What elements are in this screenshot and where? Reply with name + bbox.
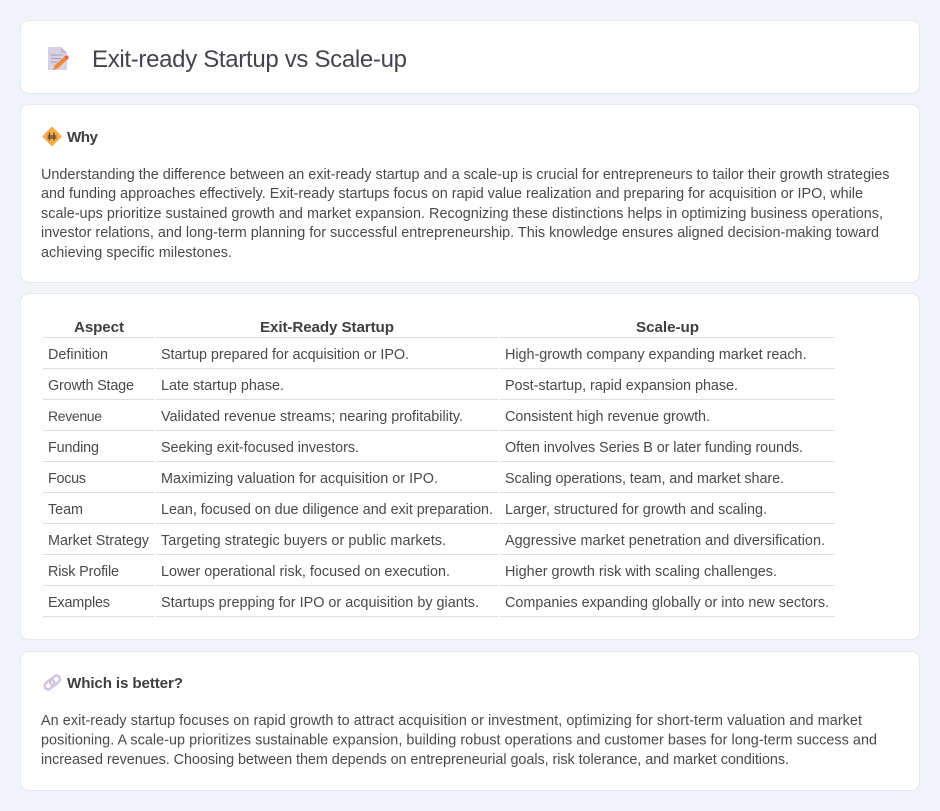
table row: examples: Companies expanding globally or into new sectors. — [505, 595, 829, 611]
table header row — [43, 319, 835, 338]
table row: team: Lean, focused on due diligence and exit preparation. — [161, 502, 493, 518]
text block: why paragraph: Understanding the difference between an exit-ready startup and a scale-up is crucial for entrepreneurs to tailor their growth strategies — [41, 167, 890, 183]
table header row: Aspect — [74, 319, 124, 336]
text block: why paragraph — [41, 167, 890, 261]
table row: revenue — [43, 408, 835, 431]
text block: why paragraph: achieving specific milestones. — [41, 245, 232, 261]
table row: market strategy: Market Strategy — [48, 533, 150, 549]
table row: funding: Often involves Series B or later funding rounds. — [505, 440, 803, 456]
table row: definition — [43, 347, 835, 369]
icon: document with pencil — [48, 47, 69, 70]
title: Exit-ready Startup vs Scale-up — [92, 46, 407, 73]
panel: title header — [20, 20, 920, 94]
table row: examples — [43, 595, 835, 617]
table row: examples: Startups prepping for IPO or acquisition by giants. — [161, 595, 479, 611]
panel: comparison table — [20, 294, 920, 640]
panel: which is better — [20, 652, 920, 790]
table row: growth stage: Late startup phase. — [161, 378, 284, 394]
table row: market strategy: Targeting strategic buyers or public markets. — [161, 533, 446, 549]
table row: team: Team — [48, 502, 83, 518]
table row: market strategy — [43, 533, 835, 555]
text block: why paragraph: and funding approaches effectively. Exit-ready startups focus on rapid value realization and preparing for acquisition or IPO, while — [41, 186, 863, 202]
table row: funding: Funding — [48, 440, 99, 456]
table header row: Exit-Ready Startup — [260, 319, 394, 336]
table row: team: Larger, structured for growth and scaling. — [505, 502, 767, 518]
table row: examples: Examples — [48, 595, 110, 611]
table header row: Scale-up — [636, 319, 699, 336]
table row: definition: Startup prepared for acquisition or IPO. — [161, 347, 409, 363]
table row: growth stage: Growth Stage — [48, 378, 134, 394]
table row: focus: Focus — [48, 471, 86, 487]
table row: focus — [43, 471, 835, 493]
table row: revenue: Validated revenue streams; nearing profitability. — [161, 409, 463, 425]
table row: definition: High-growth company expanding market reach. — [505, 347, 806, 363]
table row: definition: Definition — [48, 347, 108, 363]
table row: risk profile: Risk Profile — [48, 564, 119, 580]
table row: revenue: Revenue — [48, 408, 102, 424]
text block: verdict paragraph — [41, 713, 877, 768]
text block: why paragraph: investor relations, and long-term planning for successful entrepreneurship. This knowledge ensures aligned decision-making toward — [41, 225, 879, 241]
table row: focus: Scaling operations, team, and market share. — [505, 471, 784, 487]
panel: why — [20, 104, 920, 282]
table row: risk profile: Lower operational risk, focused on execution. — [161, 564, 450, 580]
heading: which is better: Which is better? — [67, 675, 183, 692]
text block: verdict paragraph: positioning. A scale-up prioritizes sustainable expansion, building robust operations and customer bases for long-term success and — [41, 732, 877, 748]
table row: risk profile: Higher growth risk with scaling challenges. — [505, 564, 777, 580]
table row: team — [43, 502, 835, 524]
table row: growth stage: Post-startup, rapid expansion phase. — [505, 378, 738, 394]
table row: risk profile — [43, 564, 835, 586]
icon: orange diamond sign — [43, 128, 61, 146]
text block: verdict paragraph: An exit-ready startup focuses on rapid growth to attract acquisition or investment, optimizing for short-term valuation and market — [41, 713, 862, 729]
text block: verdict paragraph: increased revenues. Choosing between them depends on entrepreneurial goals, risk tolerance, and market conditions. — [41, 752, 789, 768]
table row: market strategy: Aggressive market penetration and diversification. — [505, 533, 825, 549]
table row: focus: Maximizing valuation for acquisition or IPO. — [161, 471, 438, 487]
table row: funding: Seeking exit-focused investors. — [161, 440, 359, 456]
icon: chain link — [43, 674, 61, 691]
table row: growth stage — [43, 378, 835, 400]
heading: why: Why — [67, 129, 99, 146]
text block: why paragraph: scale-ups prioritize sustained growth and market expansion. Recognizing these distinctions helps in optimizing business operations, — [41, 206, 883, 222]
table row: funding — [43, 440, 835, 462]
table row: revenue: Consistent high revenue growth. — [505, 409, 710, 425]
